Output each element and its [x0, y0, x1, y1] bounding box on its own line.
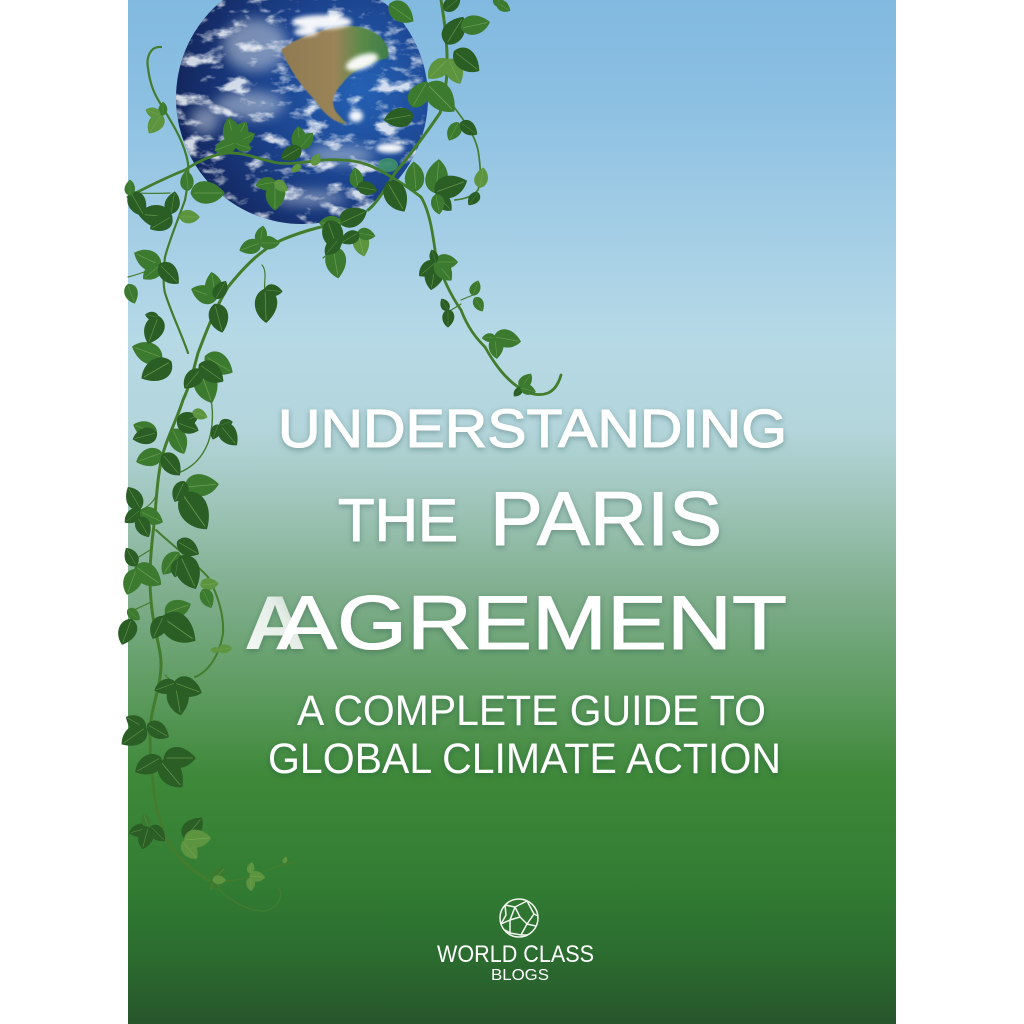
subtitle: [268, 687, 781, 783]
title line: THE PARIS: THE: [338, 487, 458, 554]
subtitle: A COMPLETE GUIDE TO: [297, 687, 766, 735]
icon: logo globe: [500, 899, 538, 937]
poster illustration: [118, 0, 896, 1024]
logo wordmark: WORLD CLASS: [437, 941, 594, 968]
title line: AAGREMENT: A: [244, 581, 306, 666]
title line: THE PARIS: PARIS: [490, 477, 722, 562]
title line: UNDERSTANDING: UNDERSTANDING: [278, 399, 787, 459]
icon: earth globe: [170, 0, 435, 235]
vines and leaves: [114, 0, 561, 911]
title text: [244, 399, 787, 783]
upper leaves: [122, 0, 537, 407]
subtitle: GLOBAL CLIMATE ACTION: [268, 735, 781, 783]
lower leaves: [114, 407, 288, 892]
logo sub-wordmark: BLOGS: [491, 967, 549, 984]
vine stems: [128, 0, 561, 911]
background gradient panel: [128, 0, 896, 1024]
title line: AAGREMENT: AGREMENT: [277, 581, 787, 666]
logo: World Class Blogs: [437, 899, 594, 984]
title line: THE PARIS: [338, 477, 722, 562]
